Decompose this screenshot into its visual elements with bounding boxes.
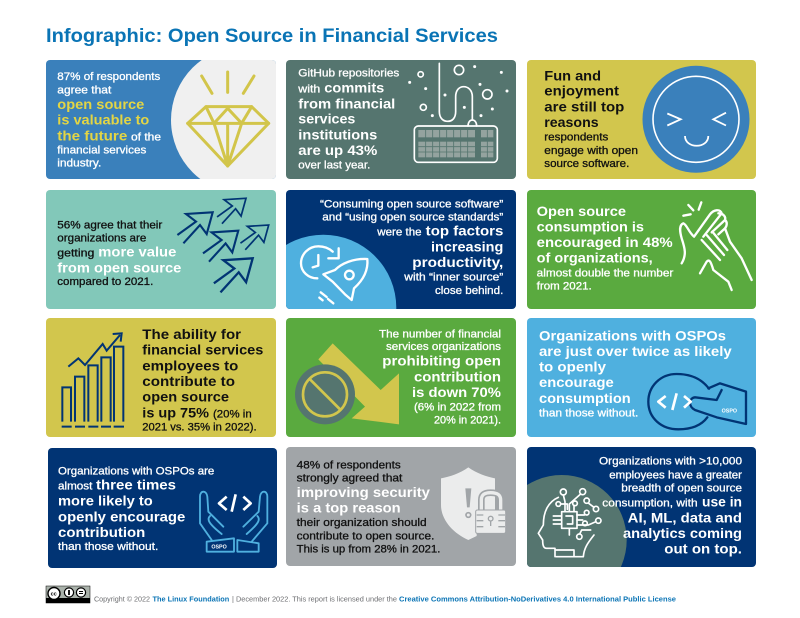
text: more value: from open source xyxy=(57,261,182,276)
text: large organizations: AI, ML, data and xyxy=(628,511,742,526)
text: productivity: top factors xyxy=(426,224,504,239)
text: valuable: the future xyxy=(57,128,128,143)
light circle backdrop xyxy=(171,60,276,179)
icon: clapping hands xyxy=(680,202,752,290)
text: valuable: financial services xyxy=(57,145,147,157)
text: valuable: is valuable to xyxy=(57,113,149,128)
panel: twice as likely xyxy=(527,318,756,437)
panel: top factors productivity xyxy=(286,190,516,309)
text: fun xyxy=(544,68,638,170)
icon: shield and padlock xyxy=(441,467,506,540)
text: ability: 2021 vs. 35% in 2022). xyxy=(142,422,257,434)
text: valuable: open source xyxy=(57,97,145,112)
icon: hands holding code xyxy=(200,492,267,552)
text: valuable: 87% of respondents xyxy=(57,71,161,83)
text: more value: more value xyxy=(98,245,177,260)
text: large organizations: use in xyxy=(702,495,742,510)
text: security: their organization should xyxy=(297,517,427,529)
text: twice xyxy=(539,328,732,419)
icon: clock and rocket xyxy=(301,246,367,303)
text: github: services xyxy=(298,112,356,127)
icon: code and OSPO hand xyxy=(648,374,746,429)
text: prohibiting: services organizations xyxy=(386,341,502,353)
panel: more value xyxy=(46,190,276,309)
icon: creative commons badge: cc xyxy=(51,592,57,598)
text: productivity: productivity, xyxy=(412,255,503,270)
text: twice: consumption xyxy=(539,391,631,407)
text: fun: engage with open xyxy=(544,145,638,157)
text: github: institutions xyxy=(298,127,378,142)
panel: three times xyxy=(48,448,277,568)
icon: hands holding code: OSPO xyxy=(211,545,227,551)
text: three times: Organizations with OSPOs are xyxy=(58,466,214,478)
text: twice: encourage xyxy=(539,375,614,391)
text: productivity xyxy=(320,198,504,297)
text: security: contribute to open source. xyxy=(297,530,434,542)
text: three times: three times xyxy=(96,478,176,493)
icon: AI head xyxy=(538,489,601,557)
text: github: are up 43% xyxy=(298,143,377,158)
text: prohibiting: prohibiting open xyxy=(382,354,501,369)
text: more value xyxy=(57,220,182,288)
text: fun: respondents xyxy=(544,131,609,143)
text: consumption xyxy=(537,204,674,293)
icon: rising arrows xyxy=(177,198,269,292)
text: prohibiting xyxy=(379,328,502,427)
footer copyright xyxy=(94,594,676,604)
text: fun: enjoyment xyxy=(544,84,619,100)
text: large organizations: out on top. xyxy=(664,542,742,557)
light blue circle xyxy=(286,234,396,309)
title: Infographic: Open Source in Financial Services xyxy=(46,26,498,47)
text: twice: are just over twice as likely xyxy=(539,344,732,360)
text: ability: financial services xyxy=(142,342,263,358)
panel: employees contribute xyxy=(46,318,276,437)
icon: keyboard and cable xyxy=(408,63,508,162)
text: three times: than those without. xyxy=(58,541,158,553)
text: large organizations: analytics coming xyxy=(623,526,742,541)
icon: down arrow and prohibited sign xyxy=(295,343,399,424)
text: three times xyxy=(58,466,214,553)
text: consumption: Open source xyxy=(537,204,626,220)
footer copyright: The Linux Foundation xyxy=(152,594,229,604)
text: productivity: were the xyxy=(376,227,422,239)
text: large organizations: breadth of open source xyxy=(621,482,742,494)
text: valuable: agree that xyxy=(57,85,111,97)
text: prohibiting: is down 70% xyxy=(412,385,501,400)
icon: smiley xyxy=(642,66,750,173)
text: three times: almost xyxy=(58,481,92,493)
text: github xyxy=(297,68,400,171)
text: twice: Organizations with OSPOs xyxy=(539,328,726,344)
text: productivity: with “inner source” xyxy=(403,272,504,284)
text: github: from financial xyxy=(298,96,395,111)
text: prohibiting: The number of financial xyxy=(379,328,501,340)
footer copyright: Copyright © 2022 xyxy=(94,594,150,604)
text: github: over last year. xyxy=(298,159,370,171)
icon: growth bar chart xyxy=(62,333,124,427)
panel: open source valuable xyxy=(46,60,276,179)
text: three times: openly encourage xyxy=(58,509,186,524)
panel: prohibiting contribution xyxy=(286,318,516,437)
text: more value: getting xyxy=(57,248,94,260)
panel: consumption encouraged xyxy=(527,190,756,309)
text: large organizations: consumption, with xyxy=(602,498,698,510)
text: large organizations xyxy=(599,456,742,557)
text: ability: The ability for xyxy=(142,327,242,343)
panel: github commits xyxy=(286,60,516,179)
text: ability xyxy=(142,327,263,434)
text: fun: Fun and xyxy=(544,68,601,84)
text: valuable: industry. xyxy=(57,158,101,170)
footer copyright: Creative Commons Attribution-NoDerivatives 4.0 International Public License xyxy=(399,594,676,604)
text: security: is a top reason xyxy=(297,501,401,516)
footer copyright: | December 2022. This report is licensed under the xyxy=(232,594,397,604)
text: three times: contribution xyxy=(58,525,145,540)
text: more value: 56% agree that their xyxy=(57,220,163,232)
text: security: strongly agreed that xyxy=(297,473,402,485)
text: prohibiting: (6% in 2022 from xyxy=(414,401,501,413)
text: productivity: and “using open source standards” xyxy=(322,212,504,224)
text: consumption: of organizations, xyxy=(537,251,653,267)
text: prohibiting: 20% in 2021). xyxy=(434,415,501,427)
icon: creative commons badge xyxy=(46,586,90,603)
text: consumption: encouraged in 48% xyxy=(537,235,673,251)
text: security: 48% of respondents xyxy=(297,460,401,472)
text: productivity: close behind. xyxy=(435,285,503,297)
text: security: This is up from 28% in 2021. xyxy=(297,544,440,556)
text: fun: are still top xyxy=(544,99,625,115)
text: prohibiting: contribution xyxy=(414,369,501,384)
panel: improving security xyxy=(286,447,516,566)
text: fun: reasons xyxy=(544,115,599,131)
text: productivity: increasing xyxy=(431,239,503,254)
text: fun: source software. xyxy=(544,158,629,170)
text: valuable: of the xyxy=(131,131,161,143)
panel: large organizations AI xyxy=(527,447,756,567)
text: twice: to openly xyxy=(539,360,606,376)
text: consumption: almost double the number xyxy=(537,267,674,279)
text: security xyxy=(297,460,440,556)
text: ability: open source xyxy=(142,390,229,406)
text: large organizations: employees have a greater xyxy=(609,469,742,481)
text: more value: compared to 2021. xyxy=(57,276,153,288)
text: consumption: from 2021. xyxy=(537,281,592,293)
text: ability: employees to xyxy=(142,358,239,374)
text: productivity: “Consuming open source software” xyxy=(320,198,504,210)
text: ability: contribute to xyxy=(142,374,235,390)
text: more value: organizations are xyxy=(57,233,146,245)
icon: diamond xyxy=(188,72,269,166)
text: ability: (20% in xyxy=(213,408,252,420)
text: twice: than those without. xyxy=(539,407,638,419)
text: consumption: consumption is xyxy=(537,220,644,236)
panel: fun and enjoyment xyxy=(527,60,756,179)
icon: code and OSPO hand: OSPO xyxy=(722,408,737,414)
slate circle xyxy=(527,475,627,567)
text: three times: more likely to xyxy=(58,494,153,509)
text: large organizations: Organizations with >10,000 xyxy=(599,456,742,468)
text: github: commits xyxy=(324,80,385,95)
text: github: GitHub repositories xyxy=(298,68,400,80)
text: ability: is up 75% xyxy=(142,405,209,421)
text: valuable xyxy=(57,71,161,170)
text: github: with xyxy=(297,83,320,95)
text: security: improving security xyxy=(297,485,430,500)
